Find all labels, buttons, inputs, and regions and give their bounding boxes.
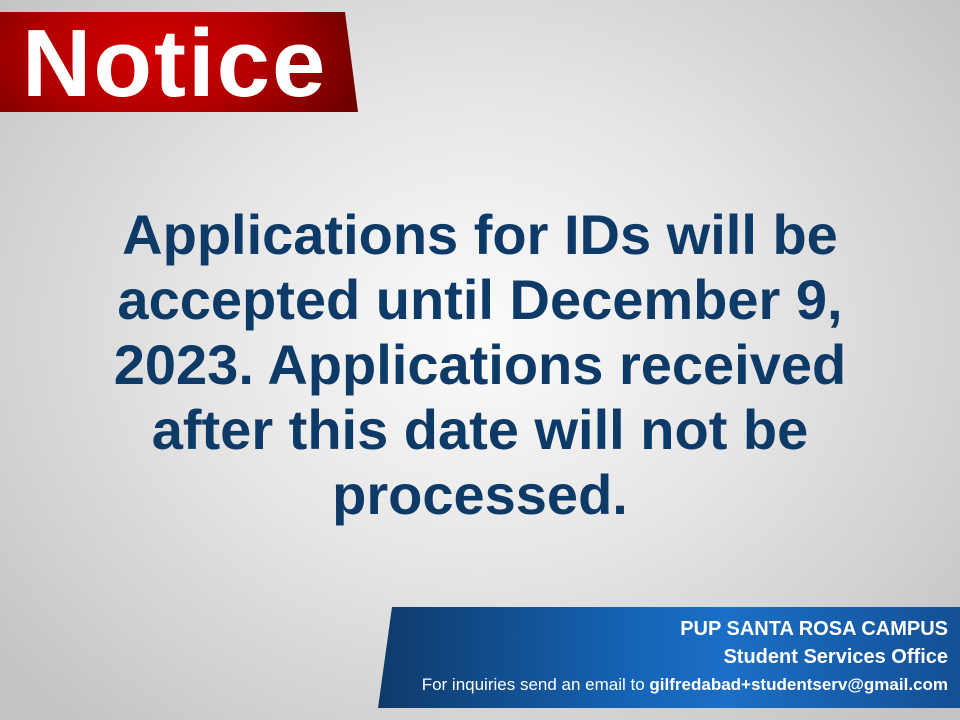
main text: Applications for IDs will be xyxy=(122,203,838,266)
main text: processed. xyxy=(332,463,628,526)
banner: notice: Notice xyxy=(22,10,327,117)
main text: after this date will not be xyxy=(152,398,808,461)
main text: 2023. Applications received xyxy=(114,333,846,396)
footer: office: Student Services Office xyxy=(723,646,948,668)
footer: contact: For inquiries send an email to gilfredabad+studentserv@gmail.com xyxy=(422,675,948,694)
main text xyxy=(114,203,846,526)
main text: accepted until December 9, xyxy=(117,268,843,331)
footer: campus name: PUP SANTA ROSA CAMPUS xyxy=(680,618,948,640)
footer panel xyxy=(378,607,960,708)
